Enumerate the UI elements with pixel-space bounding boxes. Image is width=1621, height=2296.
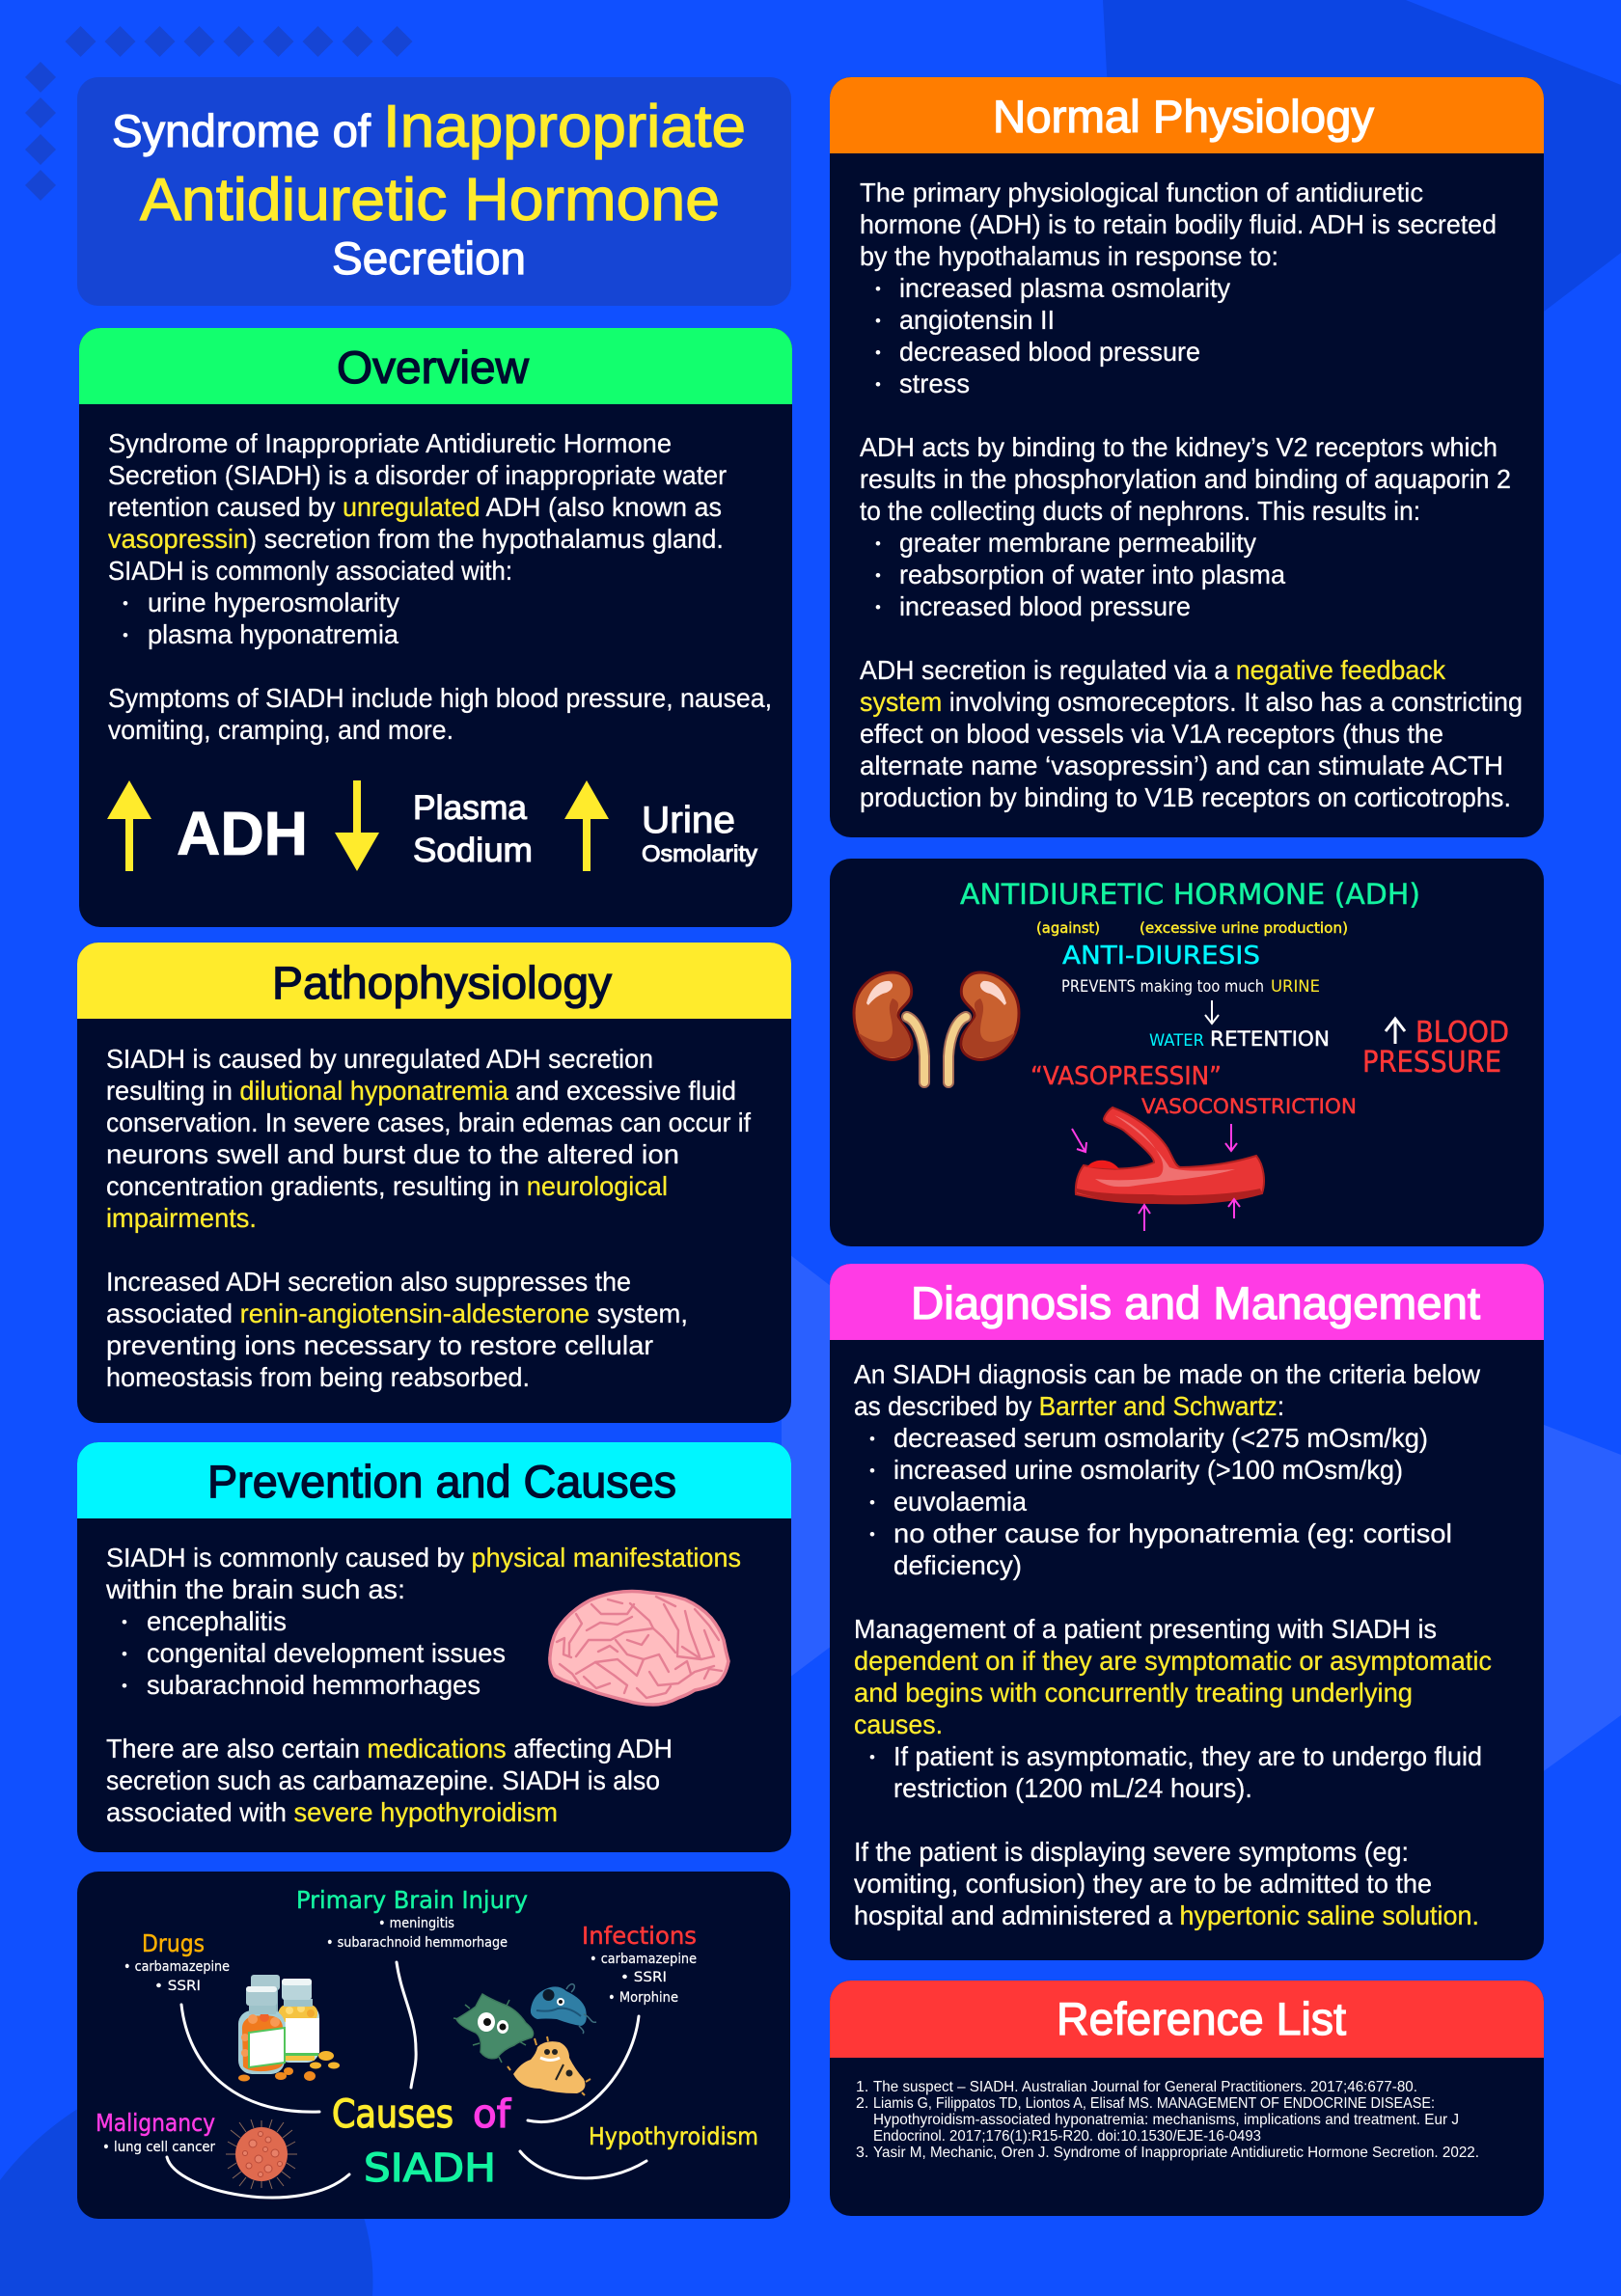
text: prevention body: encephalitis [147, 1606, 287, 1636]
text: overview body: Syndrome of Inappropriate Antidiuretic Hormone [108, 428, 672, 458]
text: normal physiology body: reabsorption of water into plasma [899, 560, 1286, 589]
panel: ADH diagram [830, 859, 1544, 1246]
text: normal physiology body: alternate name ‘vasopressin’) and can stimulate ACTH [860, 751, 1503, 780]
text: normal physiology body: • [875, 534, 881, 553]
title: Secretion [332, 232, 526, 284]
text: references: Yasir M, Mechanic, Oren J. Syndrome of Inappropriate Antidiuretic Hormone Secretion. 2022. [873, 2145, 1479, 2161]
heading: normal physiology [830, 77, 1544, 153]
panel: normal physiology [830, 77, 1544, 837]
text: diagnosis body: hospital and administered a hypertonic saline solution. [854, 1900, 1479, 1930]
label: infections: Infections [582, 1922, 697, 1950]
title: Syndrome of [112, 105, 371, 156]
label: drugs: • SSRI [154, 1979, 201, 1994]
text: normal physiology body: to the collecting ducts of nephrons. This results in: [860, 496, 1420, 526]
text: references [856, 2079, 1479, 2161]
label: primary brain injury: Primary Brain Injury [296, 1886, 528, 1914]
text: pathophysiology body: SIADH is caused by unregulated ADH secretion [106, 1044, 653, 1074]
text: diagnosis body: and begins with concurrently treating underlying [854, 1678, 1413, 1708]
text: diagnosis body: causes. [854, 1709, 943, 1739]
text: normal physiology body: decreased blood pressure [899, 337, 1200, 367]
text: normal physiology body: • [875, 566, 881, 585]
text: normal physiology body: increased blood pressure [899, 591, 1191, 621]
heading: overview: Overview [337, 342, 530, 393]
label: water retention: WATER [1149, 1031, 1204, 1051]
text: diagnosis body: no other cause for hyponatremia (eg: cortisol [893, 1518, 1452, 1548]
panel: causes of SIADH diagram [77, 1872, 790, 2219]
text: diagnosis body [854, 1359, 1492, 1930]
label: word meanings: (against) [1036, 919, 1100, 937]
label: drugs [124, 1929, 230, 1994]
text: diagnosis body: Management of a patient presenting with SIADH is [854, 1614, 1437, 1644]
text: normal physiology body: angiotensin II [899, 305, 1055, 335]
heading: pathophysiology: Pathophysiology [272, 957, 613, 1008]
text: prevention body: • [122, 1645, 127, 1663]
text: normal physiology body: increased plasma osmolarity [899, 273, 1230, 303]
text: diagnosis body: as described by Barrter and Schwartz: [854, 1391, 1284, 1421]
text: normal physiology body: greater membrane permeability [899, 528, 1256, 558]
heading: diagnosis and management: Diagnosis and Management [911, 1277, 1480, 1328]
label: anti-diuresis: ANTI-DIURESIS [1062, 942, 1260, 970]
panel: prevention and causes [77, 1442, 791, 1852]
text: normal physiology body: • [875, 598, 881, 616]
icon: brain [550, 1592, 728, 1705]
text: normal physiology body: • [875, 312, 881, 330]
text: normal physiology body: ADH secretion is regulated via a negative feedback [860, 655, 1445, 685]
arrows: vasoconstriction pressure [1072, 1124, 1240, 1231]
label: plasma sodium: Sodium [413, 832, 533, 869]
label: infections: • Morphine [608, 1990, 678, 2006]
icon: kidneys [854, 972, 1019, 1082]
heading: prevention and causes [77, 1442, 791, 1518]
text: diagnosis body: • [869, 1430, 875, 1448]
text: diagnosis body: If patient is asymptomatic, they are to undergo fluid [893, 1741, 1482, 1771]
text: overview body: vomiting, cramping, and more. [108, 715, 453, 745]
text: references: Endocrinol. 2017;176(1):R15-R20. doi:10.1530/EJE-16-0493 [873, 2128, 1261, 2145]
label: primary brain injury [296, 1886, 528, 1951]
title [112, 94, 746, 284]
text: overview body: Symptoms of SIADH include high blood pressure, nausea, [108, 683, 772, 713]
title panel [77, 77, 791, 306]
text: prevention body: congenital development issues [147, 1638, 506, 1668]
text: normal physiology body: system involving osmoreceptors. It also has a constricting [860, 687, 1523, 717]
connector curves [167, 1962, 646, 2198]
text: pathophysiology body: associated renin-angiotensin-aldesterone system, [106, 1298, 688, 1328]
label: blood pressure: PRESSURE [1362, 1046, 1501, 1080]
text: prevention body: within the brain such as: [105, 1574, 405, 1604]
label: word meanings [1036, 919, 1348, 937]
text: pathophysiology body [106, 1044, 751, 1392]
text: pathophysiology body: conservation. In severe cases, brain edemas can occur if [106, 1107, 751, 1137]
text: references: 2. [856, 2095, 868, 2112]
text: normal physiology body: stress [899, 369, 970, 398]
text: pathophysiology body: neurons swell and burst due to the altered ion [106, 1139, 679, 1169]
label: plasma sodium [413, 789, 533, 869]
text: pathophysiology body: Increased ADH secretion also suppresses the [106, 1267, 631, 1297]
icon: pill bottles [238, 1975, 340, 2082]
text: references: 1. [856, 2079, 868, 2095]
text: prevention body: • [122, 1613, 127, 1631]
label: malignancy: Malignancy [96, 2109, 215, 2137]
text: overview body: retention caused by unregulated ADH (also known as [108, 492, 722, 522]
heading: prevention and causes: Prevention and Causes [207, 1456, 676, 1507]
text: pathophysiology body: homeostasis from being reabsorbed. [106, 1362, 530, 1392]
label: plasma sodium: Plasma [413, 789, 528, 827]
text: references: 3. [856, 2145, 868, 2161]
text: overview body: • [123, 626, 128, 644]
text: prevention body: subarachnoid hemmorhages [147, 1670, 481, 1700]
arrow: blood pressure up [1386, 1019, 1405, 1044]
text: diagnosis body: increased urine osmolarity (>100 mOsm/kg) [893, 1455, 1403, 1485]
heading: reference list: Reference List [1057, 1993, 1346, 2044]
label: vasoconstriction: VASOCONSTRICTION [1141, 1095, 1357, 1118]
text: pathophysiology body: impairments. [106, 1203, 257, 1233]
text: diagnosis body: If the patient is displaying severe symptoms (eg: [854, 1837, 1409, 1867]
icon: plasma sodium down arrow [335, 780, 379, 871]
text: diagnosis body: restriction (1200 mL/24 hours). [893, 1773, 1252, 1803]
text: diagnosis body: deficiency) [893, 1550, 1022, 1580]
text: normal physiology body [860, 178, 1523, 812]
text: diagnosis body: • [869, 1462, 875, 1480]
title: Antidiuretic Hormone [140, 167, 720, 233]
heading: normal physiology: Normal Physiology [993, 91, 1375, 142]
heading: reference list [830, 1981, 1544, 2058]
text: diagnosis body: decreased serum osmolarity (<275 mOsm/kg) [893, 1423, 1428, 1453]
text: normal physiology body: The primary physiological function of antidiuretic [860, 178, 1423, 207]
text: overview body: plasma hyponatremia [148, 619, 399, 649]
text: diagnosis body: • [869, 1493, 875, 1512]
label: water retention: RETENTION [1210, 1027, 1330, 1051]
text: prevention body: associated with severe hypothyroidism [106, 1797, 558, 1827]
label: prevents urine: URINE [1271, 977, 1320, 997]
label: primary brain injury: • meningitis [378, 1916, 454, 1931]
label: antidiuretic hormone: ANTIDIURETIC HORMONE (ADH) [960, 878, 1420, 911]
text: normal physiology body: hormone (ADH) is to retain bodily fluid. ADH is secreted [860, 209, 1497, 239]
icon: cancer cell [226, 2119, 297, 2189]
label: infections: • carbamazepine [590, 1952, 697, 1967]
text: overview body: • [123, 594, 128, 613]
label: primary brain injury: • subarachnoid hemmorhage [326, 1935, 508, 1951]
text: diagnosis body: • [869, 1748, 875, 1766]
text: overview body: urine hyperosmolarity [148, 588, 399, 617]
text: normal physiology body: effect on blood vessels via V1A receptors (thus the [860, 719, 1443, 749]
label: blood pressure [1362, 1016, 1509, 1080]
panel: pathophysiology [77, 943, 791, 1423]
label: infections [582, 1922, 697, 2006]
heading: diagnosis and management [830, 1264, 1544, 1340]
icon: ADH up arrow [107, 780, 151, 871]
text: diagnosis body: • [869, 1525, 875, 1544]
heading: overview [79, 328, 792, 404]
label: urine osmolarity: Osmolarity [642, 841, 757, 867]
text: prevention body: There are also certain medications affecting ADH [106, 1734, 673, 1763]
arrow: to water retention [1205, 1000, 1219, 1024]
text: overview body [108, 428, 772, 745]
text: normal physiology body: production by binding to V1B receptors on corticotrophs. [860, 782, 1511, 812]
label: vasopressin: “VASOPRESSIN” [1030, 1062, 1222, 1091]
text: diagnosis body: euvolaemia [893, 1487, 1028, 1517]
text: overview body: Secretion (SIADH) is a disorder of inappropriate water [108, 460, 727, 490]
text: normal physiology body: • [875, 375, 881, 394]
text: prevention body: secretion such as carbamazepine. SIADH is also [106, 1765, 660, 1795]
panel: reference list [830, 1981, 1544, 2216]
text: overview body: vasopressin) secretion from the hypothalamus gland. [108, 524, 724, 554]
text: normal physiology body: results in the phosphorylation and binding of aquaporin 2 [860, 464, 1511, 494]
icon: blood vessel [1076, 1107, 1264, 1203]
panel: overview [79, 328, 792, 927]
text: normal physiology body: by the hypothalamus in response to: [860, 241, 1278, 271]
text: overview body: SIADH is commonly associated with: [108, 556, 512, 586]
label: ADH: ADH [177, 799, 308, 868]
label: hypothyroidism: Hypothyroidism [589, 2122, 758, 2150]
panel: diagnosis and management [830, 1264, 1544, 1960]
text: prevention body: SIADH is commonly caused by physical manifestations [106, 1543, 741, 1572]
title: Inappropriate [383, 94, 746, 160]
label: causes of SIADH: of [473, 2092, 511, 2137]
text: normal physiology body: • [875, 280, 881, 298]
label: causes of SIADH: SIADH [364, 2146, 496, 2191]
text: diagnosis body: dependent on if they are symptomatic or asymptomatic [854, 1646, 1492, 1676]
label: water retention [1149, 1027, 1330, 1051]
text: prevention body: • [122, 1677, 127, 1695]
text: prevention body [105, 1543, 741, 1827]
label: word meanings: (excessive urine production) [1140, 919, 1348, 937]
text: diagnosis body: vomiting, confusion) they are to be admitted to the [854, 1869, 1432, 1899]
text: references: The suspect – SIADH. Australian Journal for General Practitioners. 2017;46:677-80. [873, 2079, 1417, 2095]
text: normal physiology body: ADH acts by binding to the kidney’s V2 receptors which [860, 432, 1497, 462]
text: references: Hypothyroidism-associated hyponatremia: mechanisms, implications and treatment. Eur J [873, 2112, 1459, 2128]
label: causes of SIADH [332, 2092, 511, 2191]
label: blood pressure: BLOOD [1415, 1016, 1509, 1050]
text: pathophysiology body: preventing ions necessary to restore cellular [106, 1330, 653, 1360]
label: prevents urine: PREVENTS making too much [1061, 977, 1264, 997]
label: drugs: • carbamazepine [124, 1959, 230, 1975]
label: malignancy [96, 2109, 215, 2155]
text: normal physiology body: • [875, 343, 881, 362]
label: drugs: Drugs [142, 1929, 205, 1957]
label: urine osmolarity [642, 800, 757, 867]
label: causes of SIADH: Causes [332, 2092, 453, 2137]
icon: microbes [453, 1984, 596, 2095]
text: pathophysiology body: concentration gradients, resulting in neurological [106, 1171, 668, 1201]
icon: urine osmolarity up arrow [564, 780, 609, 871]
label: infections: • SSRI [620, 1970, 667, 1985]
text: references: Liamis G, Filippatos TD, Liontos A, Elisaf MS. MANAGEMENT OF ENDOCRINE DISEASE: [873, 2095, 1435, 2112]
text: diagnosis body: An SIADH diagnosis can be made on the criteria below [854, 1359, 1480, 1389]
label: malignancy: • lung cell cancer [102, 2140, 215, 2155]
text: pathophysiology body: resulting in dilutional hyponatremia and excessive fluid [106, 1076, 736, 1106]
label: urine osmolarity: Urine [642, 800, 735, 841]
heading: pathophysiology [77, 943, 791, 1019]
